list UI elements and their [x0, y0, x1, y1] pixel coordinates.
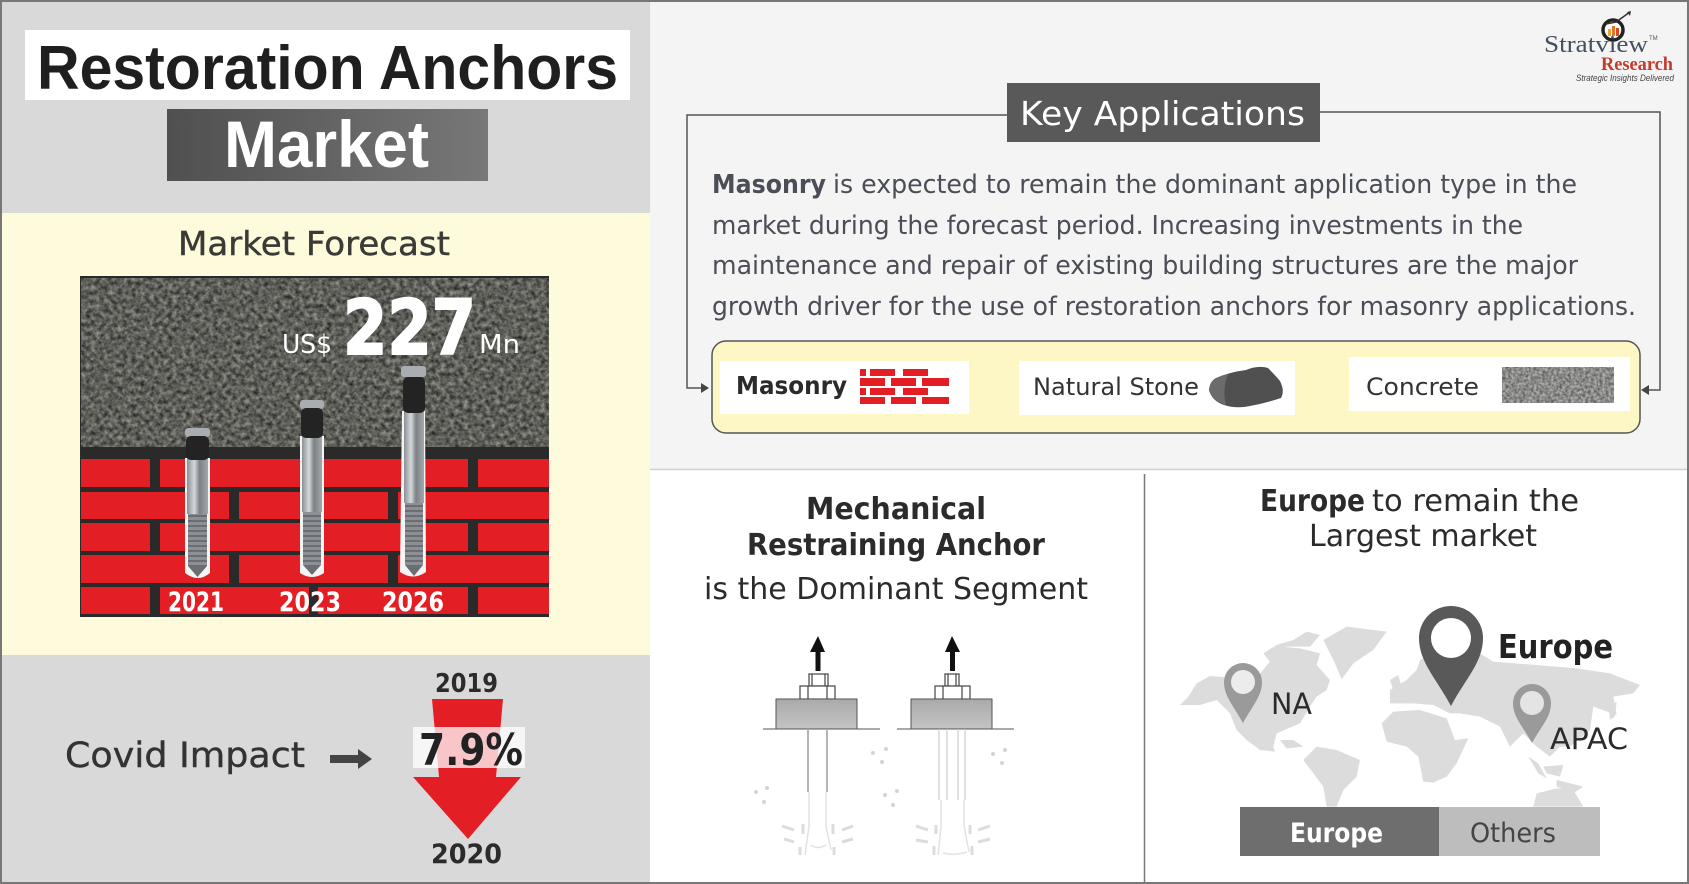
year labels	[168, 587, 444, 618]
anchor: 2026	[400, 366, 426, 576]
diagram: anchor type 2	[897, 636, 1014, 855]
panel: market forecast	[0, 213, 650, 655]
pin: asia pacific	[1513, 684, 1551, 743]
icon: concrete swatch	[1502, 367, 1614, 403]
item: natural stone	[1019, 361, 1295, 415]
covid label: Covid Impact	[65, 736, 305, 776]
heading: key applications	[1007, 83, 1320, 142]
market value	[282, 283, 520, 372]
region labels: Europe	[1498, 627, 1613, 666]
panel: title	[0, 0, 650, 213]
heading: largest market: to remain the	[1372, 484, 1579, 519]
market value: US$	[282, 330, 332, 360]
heading: dominant segment: Restraining Anchor	[747, 528, 1045, 563]
anchor: 2023	[300, 400, 324, 577]
title line 1: Restoration Anchors	[37, 34, 618, 103]
item: natural stone: Natural Stone	[1033, 373, 1199, 401]
logo: stratview research: Strategic Insights Delivered	[1576, 73, 1675, 83]
heading: dominant segment: Mechanical	[806, 492, 986, 527]
region labels: APAC	[1550, 722, 1628, 756]
concrete texture	[81, 278, 549, 447]
decline arrow	[413, 699, 521, 839]
logo: stratview research: Research	[1601, 54, 1673, 75]
region labels	[1271, 627, 1628, 756]
diagram: anchor type 1	[754, 636, 899, 855]
item: concrete	[1349, 357, 1630, 411]
logo: stratview research: TM	[1649, 36, 1658, 42]
heading: dominant segment: is the Dominant Segment	[704, 572, 1088, 607]
panel: mechanical restraining anchor	[704, 492, 1088, 855]
icon: bricks	[860, 369, 949, 404]
icon: stone	[1209, 367, 1283, 407]
paragraph: masonry description	[712, 170, 1636, 322]
icon: stress arrows	[916, 825, 990, 855]
item: masonry	[720, 361, 969, 414]
heading: largest market	[1260, 484, 1579, 554]
pin: north america	[1224, 663, 1262, 723]
item: concrete: Concrete	[1366, 373, 1479, 401]
paragraph: masonry description: market during the forecast period. Increasing investments in the	[712, 211, 1523, 241]
application strip	[712, 341, 1640, 433]
icon: magnifier chart	[1603, 11, 1631, 40]
world map	[1180, 627, 1640, 807]
panel: regional market	[1180, 484, 1640, 856]
year 2020: 2020	[431, 839, 502, 870]
anchor: 2021	[185, 428, 210, 578]
paragraph: masonry description: is expected to remain the dominant application type in the	[833, 170, 1577, 200]
year labels: 2021	[168, 587, 224, 618]
panel: key applications	[650, 0, 1689, 469]
share bar: Europe	[1290, 818, 1383, 849]
item: masonry: Masonry	[736, 371, 847, 400]
icon: stress arrows	[782, 824, 853, 855]
logo: stratview research	[1544, 11, 1675, 83]
chart: anchors in brick wall	[80, 276, 549, 618]
title line 2	[167, 107, 488, 181]
heading: largest market: Europe	[1260, 484, 1365, 519]
brick wall	[81, 459, 549, 614]
icon: frame arrowheads	[701, 383, 1649, 395]
icon: arrow to decline	[330, 749, 372, 769]
market value: 227	[343, 283, 476, 372]
paragraph: masonry description: maintenance and repair of existing building structures are the major	[712, 251, 1578, 281]
region labels: NA	[1271, 687, 1312, 721]
heading: market forecast: Market Forecast	[178, 224, 450, 263]
share bar: Others	[1470, 818, 1556, 849]
heading: dominant segment	[704, 492, 1088, 607]
year labels: 2023	[279, 587, 341, 618]
paragraph: masonry description: growth driver for the use of restoration anchors for masonry applications.	[712, 292, 1636, 322]
title line 2: Market	[224, 107, 429, 181]
year 2019: 2019	[435, 669, 498, 699]
year labels: 2026	[382, 587, 444, 618]
logo: stratview research: Stratview	[1544, 32, 1649, 58]
heading: key applications: Key Applications	[1020, 94, 1305, 133]
pin: europe	[1419, 606, 1483, 706]
frame with arrows	[687, 112, 1660, 390]
share bar	[1240, 807, 1600, 856]
market value: Mn	[479, 330, 520, 360]
paragraph: masonry description: Masonry	[712, 170, 826, 200]
panel: covid impact	[0, 655, 650, 884]
heading: largest market: Largest market	[1309, 519, 1537, 554]
percentage callout: 7.9%	[419, 725, 523, 776]
